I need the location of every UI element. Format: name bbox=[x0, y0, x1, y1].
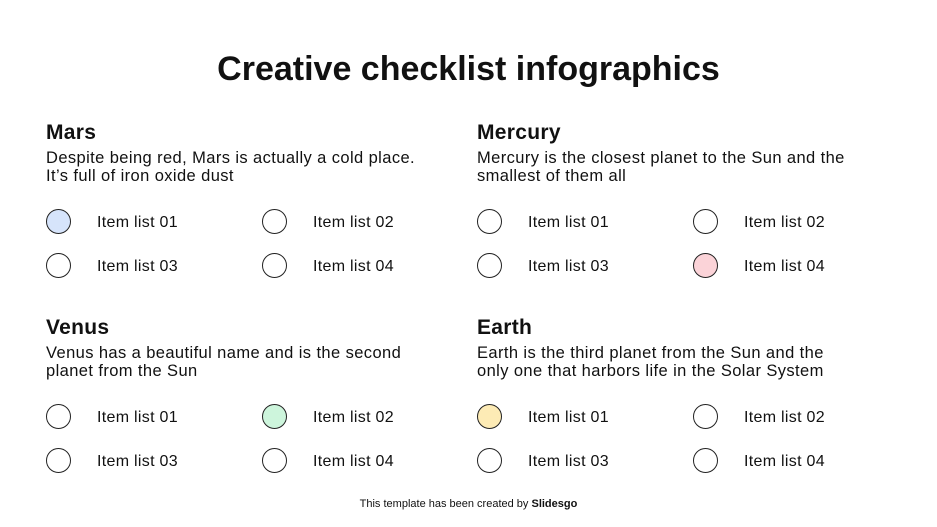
item 01 bbox=[477, 404, 609, 429]
description: only one that harbors life in the Solar System bbox=[477, 362, 824, 380]
item 02 bbox=[693, 209, 825, 234]
item 02 bbox=[262, 404, 394, 429]
item 04 bbox=[693, 253, 825, 278]
heading: Earth: Earth bbox=[477, 316, 532, 339]
heading: Mars: Mars bbox=[46, 121, 96, 144]
description: Mercury is the closest planet to the Sun and the bbox=[477, 149, 845, 167]
description: planet from the Sun bbox=[46, 362, 198, 380]
item 01: Item list 01 bbox=[528, 214, 609, 231]
item 03: Item list 03 bbox=[528, 453, 609, 470]
footer credit: This template has been created by Slidesgo bbox=[360, 498, 577, 510]
item 02: Item list 02 bbox=[313, 409, 394, 426]
description: Despite being red, Mars is actually a cold place. bbox=[46, 149, 415, 167]
description bbox=[46, 149, 415, 185]
description: smallest of them all bbox=[477, 167, 626, 185]
item 03: Item list 03 bbox=[97, 258, 178, 275]
item 01 bbox=[46, 209, 178, 234]
description bbox=[46, 344, 401, 380]
description bbox=[477, 149, 845, 185]
panel: Mars bbox=[46, 121, 415, 278]
heading: Venus: Venus bbox=[46, 316, 109, 339]
item 02: Item list 02 bbox=[744, 409, 825, 426]
item 01: Item list 01 bbox=[97, 409, 178, 426]
item 04: Item list 04 bbox=[313, 258, 394, 275]
item 02: Item list 02 bbox=[744, 214, 825, 231]
item 03 bbox=[477, 448, 609, 473]
item 03 bbox=[46, 253, 178, 278]
panel: Mercury bbox=[477, 121, 845, 278]
item 04 bbox=[693, 448, 825, 473]
description: Earth is the third planet from the Sun and the bbox=[477, 344, 824, 362]
item 02: Item list 02 bbox=[313, 214, 394, 231]
item 01 bbox=[477, 209, 609, 234]
item 03: Item list 03 bbox=[97, 453, 178, 470]
item 04: Item list 04 bbox=[744, 453, 825, 470]
item 02 bbox=[693, 404, 825, 429]
item 01: Item list 01 bbox=[528, 409, 609, 426]
panel: Earth bbox=[477, 316, 825, 473]
item 02 bbox=[262, 209, 394, 234]
description: It’s full of iron oxide dust bbox=[46, 167, 234, 185]
description bbox=[477, 344, 824, 380]
heading: Mercury: Mercury bbox=[477, 121, 561, 144]
panel: Venus bbox=[46, 316, 401, 473]
item 03: Item list 03 bbox=[528, 258, 609, 275]
item 04 bbox=[262, 448, 394, 473]
item 04 bbox=[262, 253, 394, 278]
item 04: Item list 04 bbox=[744, 258, 825, 275]
item 01: Item list 01 bbox=[97, 214, 178, 231]
item 03 bbox=[46, 448, 178, 473]
description: Venus has a beautiful name and is the second bbox=[46, 344, 401, 362]
item 04: Item list 04 bbox=[313, 453, 394, 470]
title: Creative checklist infographics bbox=[217, 50, 720, 88]
item 03 bbox=[477, 253, 609, 278]
item 01 bbox=[46, 404, 178, 429]
